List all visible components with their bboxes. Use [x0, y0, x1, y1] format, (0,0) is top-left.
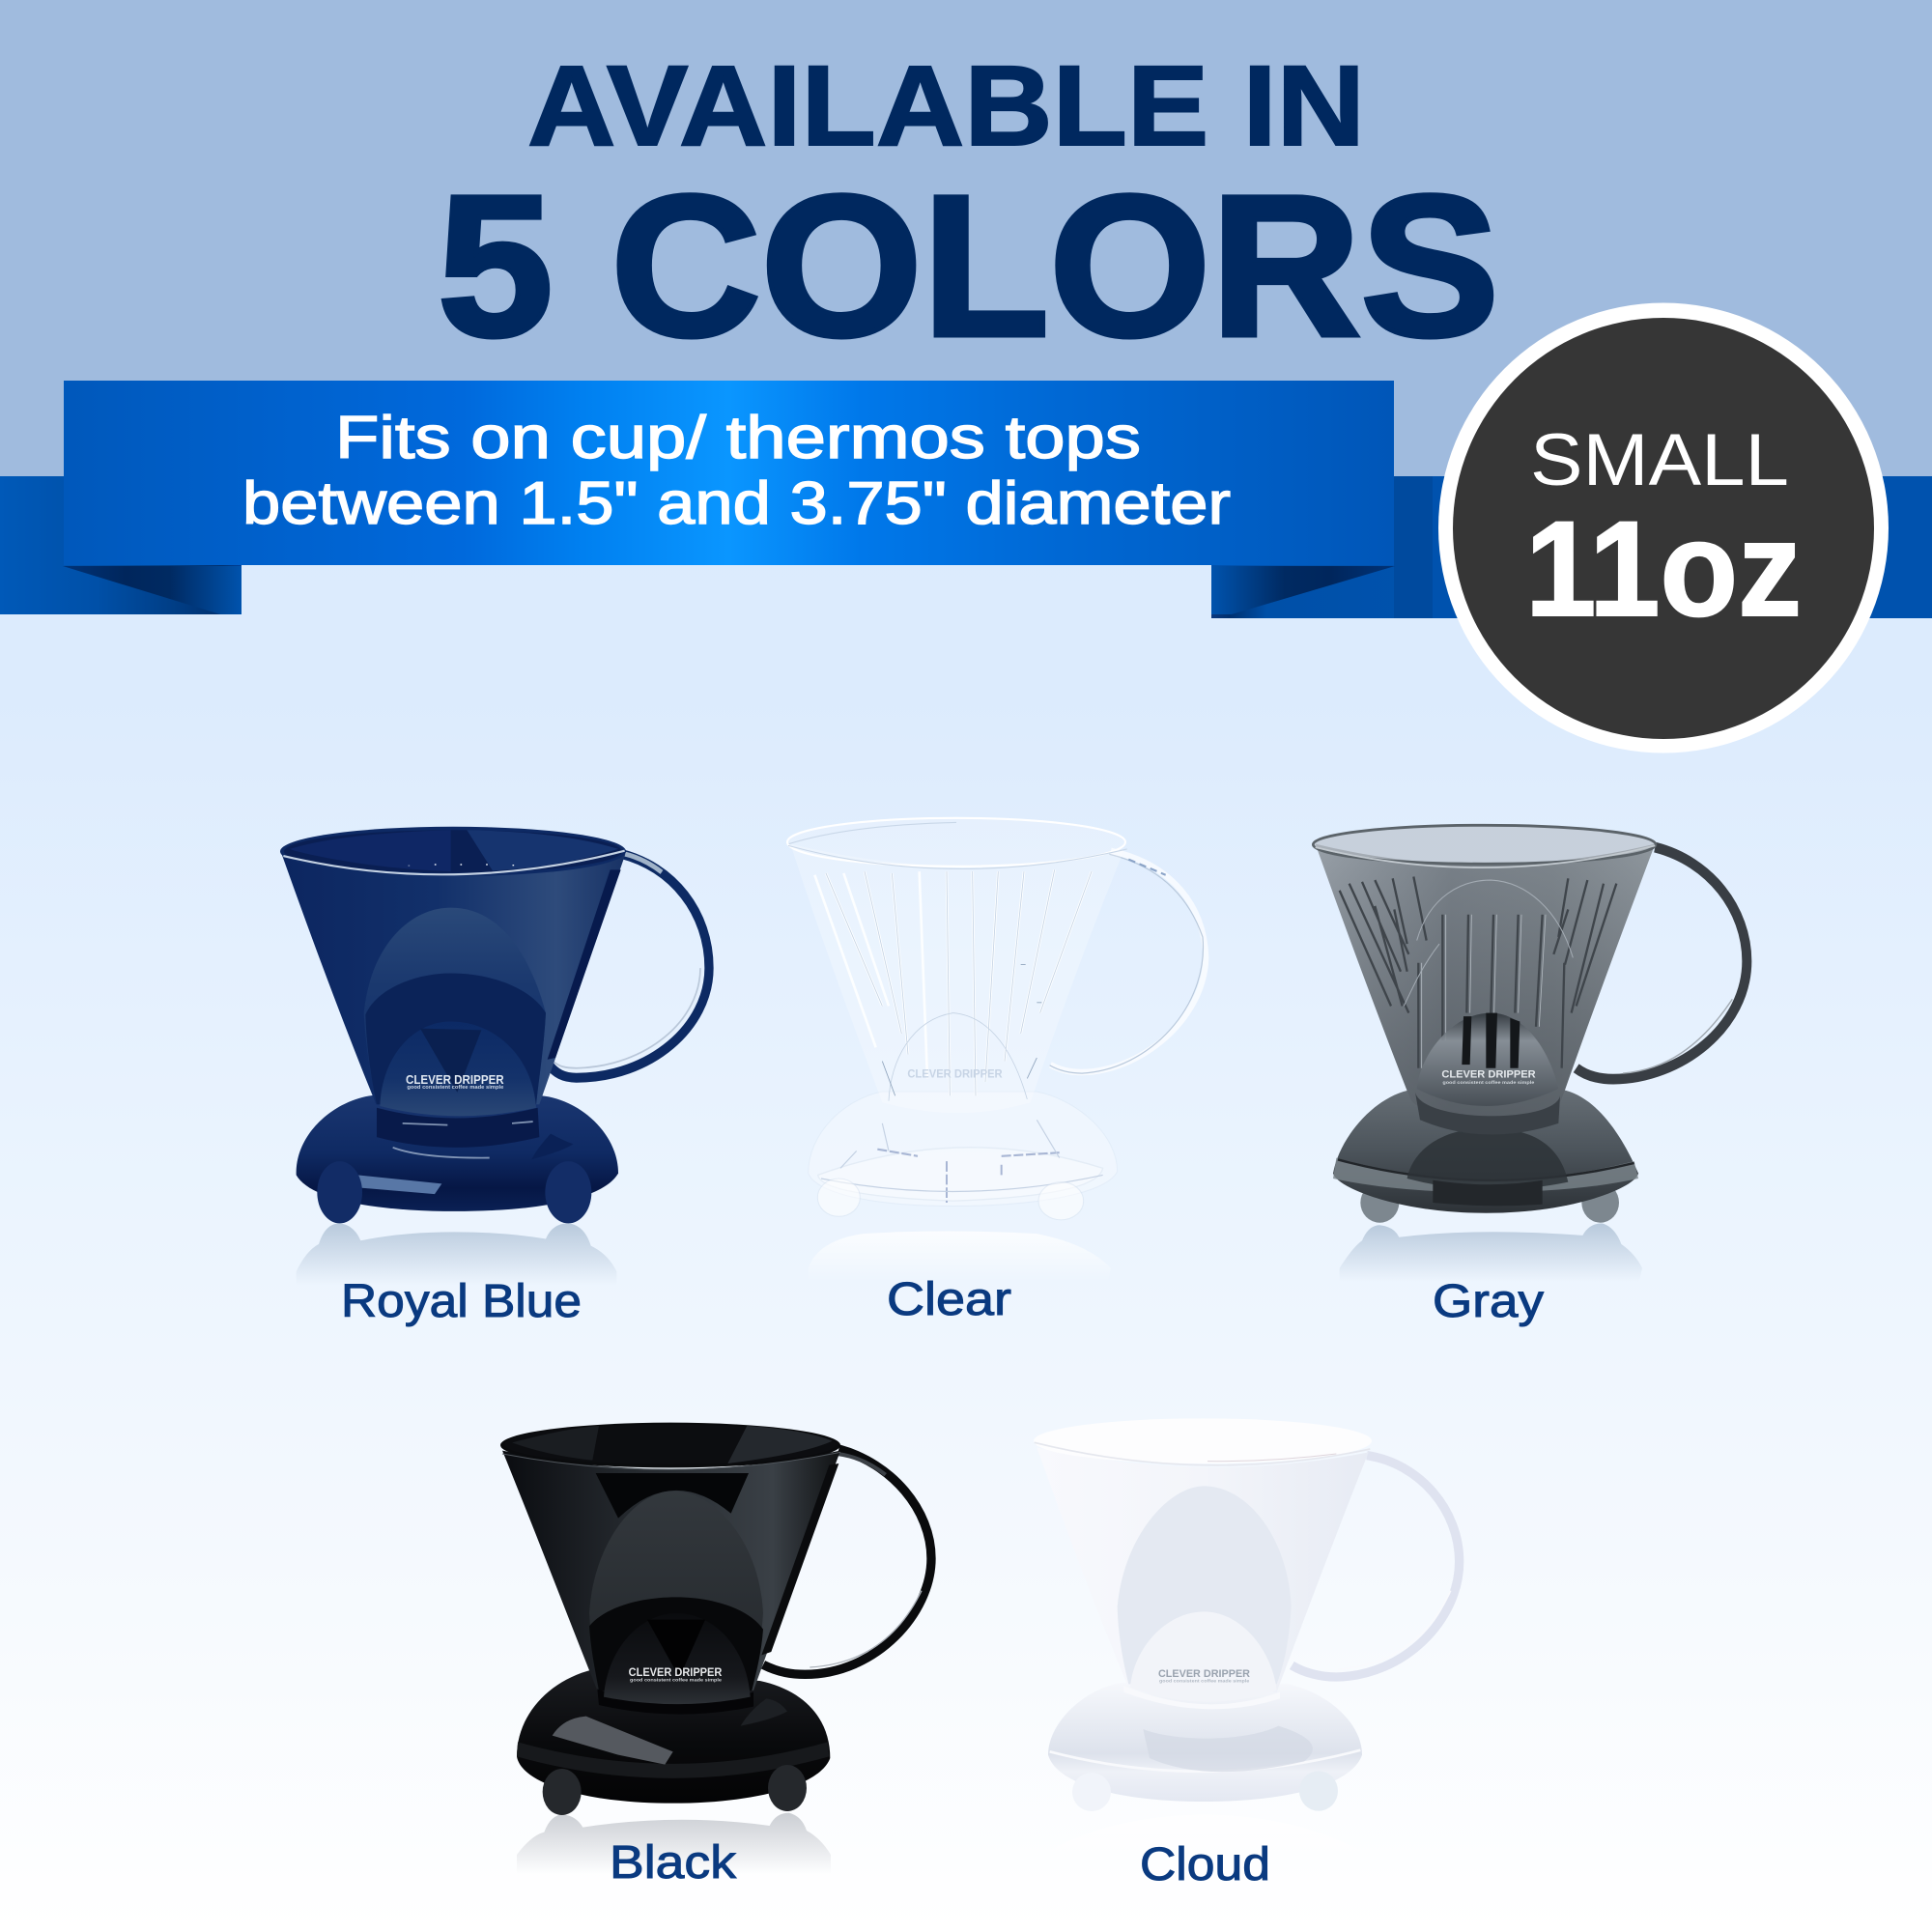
- dripper: cloud: [1034, 1418, 1460, 1867]
- dripper: clear: CLEVER DRIPPER: [907, 1067, 1003, 1081]
- dripper: gray: good consistent coffee made simple: [1442, 1080, 1535, 1085]
- dripper: royal blue: [280, 827, 709, 1286]
- ribbon text: Fits on cup/ thermos tops: [335, 405, 1141, 471]
- dripper: black: CLEVER DRIPPER: [629, 1665, 723, 1679]
- title: 5 COLORS: [438, 155, 1499, 379]
- dripper: royal blue: good consistent coffee made simple: [407, 1085, 504, 1091]
- label: clear: Clear: [887, 1274, 1011, 1325]
- dripper: gray: [1313, 825, 1747, 1282]
- ribbon banner: [0, 381, 1932, 618]
- dripper: cloud: CLEVER DRIPPER: [1158, 1668, 1250, 1680]
- title: AVAILABLE IN: [527, 43, 1365, 170]
- label: royal blue: Royal Blue: [341, 1276, 582, 1327]
- dripper: black: [500, 1423, 931, 1874]
- ribbon text: between 1.5" and 3.75" diameter: [242, 470, 1231, 537]
- title: [438, 43, 1499, 379]
- dripper: royal blue: CLEVER DRIPPER: [406, 1071, 504, 1087]
- label: black: Black: [610, 1837, 737, 1889]
- size badge: 11oz: [1525, 493, 1802, 644]
- ribbon text: [242, 405, 1231, 537]
- dripper: clear: [787, 818, 1206, 1282]
- label: gray: Gray: [1433, 1276, 1544, 1327]
- dripper: gray: CLEVER DRIPPER: [1441, 1068, 1536, 1081]
- background: header band: [0, 0, 1932, 477]
- size badge: SMALL: [1530, 419, 1789, 501]
- label: cloud: Cloud: [1140, 1839, 1270, 1890]
- dripper: cloud: good consistent coffee made simple: [1159, 1679, 1250, 1684]
- dripper: black: good consistent coffee made simple: [630, 1678, 722, 1683]
- size badge: [1438, 303, 1889, 753]
- background: light lower area: [0, 473, 1932, 1932]
